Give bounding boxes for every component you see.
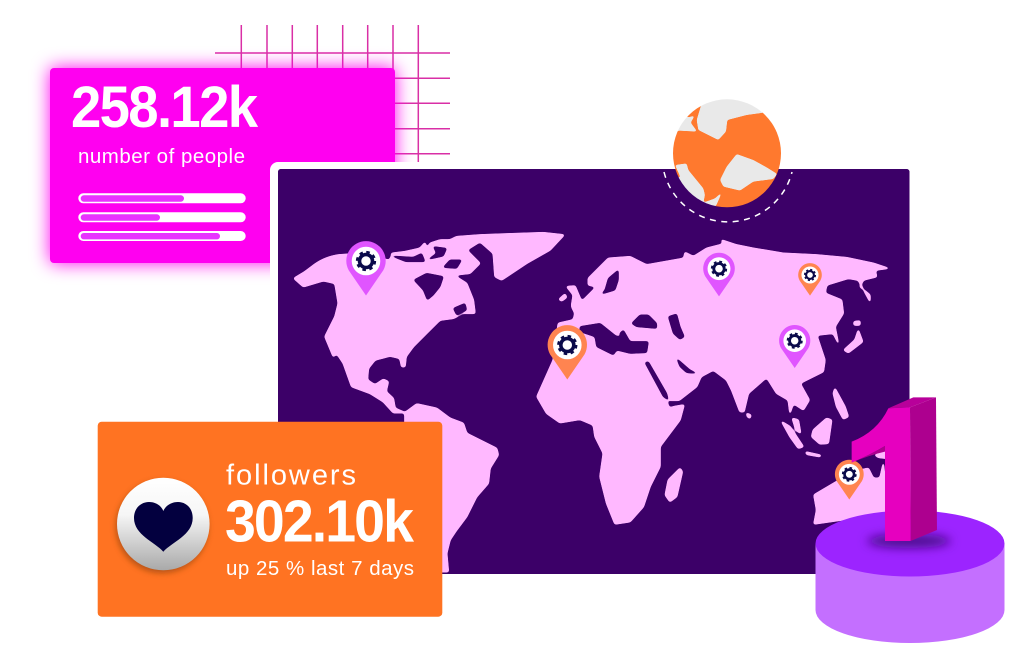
panel: followers card bbox=[98, 422, 442, 617]
panel: number of people card bbox=[50, 68, 395, 263]
icon: heart button bbox=[116, 478, 210, 573]
map pin: Australia bbox=[835, 460, 864, 500]
podium with number one bbox=[815, 397, 1004, 643]
cylinder podium bbox=[815, 510, 1004, 643]
map pin: West Africa bbox=[548, 325, 587, 379]
map pin: East Russia bbox=[798, 263, 822, 296]
stat: 258.12k: 258.12k bbox=[71, 74, 259, 139]
numeral 1, 3D bbox=[852, 397, 937, 541]
label: number of people: number of people bbox=[78, 145, 245, 168]
progress bars bbox=[78, 193, 246, 241]
panel: world map bbox=[270, 162, 910, 574]
map pin: Russia bbox=[703, 253, 735, 296]
decorative grid bbox=[215, 25, 450, 162]
label: followers: followers bbox=[226, 459, 356, 491]
stat: 302.10k: 302.10k bbox=[225, 489, 414, 555]
map: continents bbox=[278, 169, 910, 572]
map pin: North America bbox=[346, 241, 386, 295]
globe with dashed orbit bbox=[663, 99, 793, 223]
map pin: China bbox=[779, 325, 810, 368]
label: up 25 % last 7 days: up 25 % last 7 days bbox=[226, 557, 414, 580]
